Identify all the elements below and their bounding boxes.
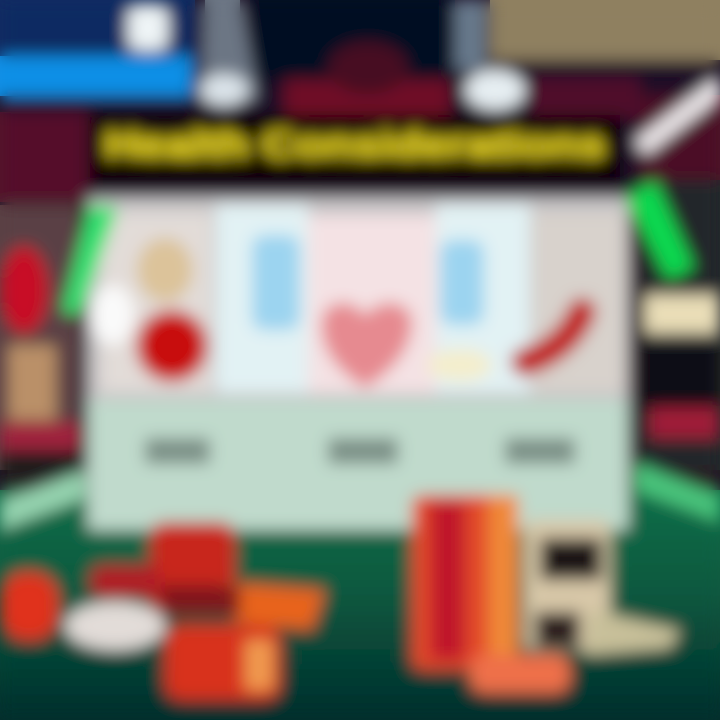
icon: red circle bbox=[136, 310, 208, 382]
right side scene bbox=[640, 180, 720, 470]
title text: Health Considerations bbox=[105, 124, 605, 165]
top right tan banner bbox=[490, 0, 720, 118]
panel lower band bbox=[88, 400, 628, 530]
green tab left bbox=[62, 205, 118, 315]
icon: red streak bbox=[525, 312, 582, 362]
panel column centre bbox=[308, 215, 436, 393]
title band bbox=[90, 115, 620, 183]
main panel bbox=[88, 197, 628, 530]
green tab right bbox=[625, 180, 694, 280]
panel column right bbox=[532, 212, 624, 392]
panel column blue right bbox=[436, 205, 530, 393]
icon: pale yellow patch bbox=[428, 349, 492, 381]
icon: tan figure bbox=[137, 238, 193, 302]
red cluster left bbox=[90, 522, 325, 700]
left side scene bbox=[0, 205, 80, 476]
caption left bbox=[145, 438, 210, 464]
white object left bbox=[65, 602, 165, 650]
top left blue banner bbox=[0, 0, 195, 96]
caption right bbox=[505, 438, 575, 464]
panel column left bbox=[100, 212, 212, 392]
icon: white shape bbox=[90, 285, 134, 345]
red column right bbox=[412, 495, 570, 693]
white diagonal streak bbox=[640, 86, 720, 148]
caption centre bbox=[328, 438, 398, 464]
icon: pink heart bbox=[321, 303, 412, 388]
panel column blue left bbox=[216, 205, 308, 393]
side maroon panels bbox=[0, 95, 720, 202]
dark and cream object bbox=[525, 520, 680, 655]
red object far left bbox=[0, 572, 58, 640]
icon: blue bottle right bbox=[440, 240, 484, 325]
top centre dark arch bbox=[250, 0, 460, 122]
icon: blue bottle left bbox=[252, 235, 300, 330]
top grey columns bbox=[200, 0, 525, 110]
floor light strips bbox=[0, 462, 720, 530]
